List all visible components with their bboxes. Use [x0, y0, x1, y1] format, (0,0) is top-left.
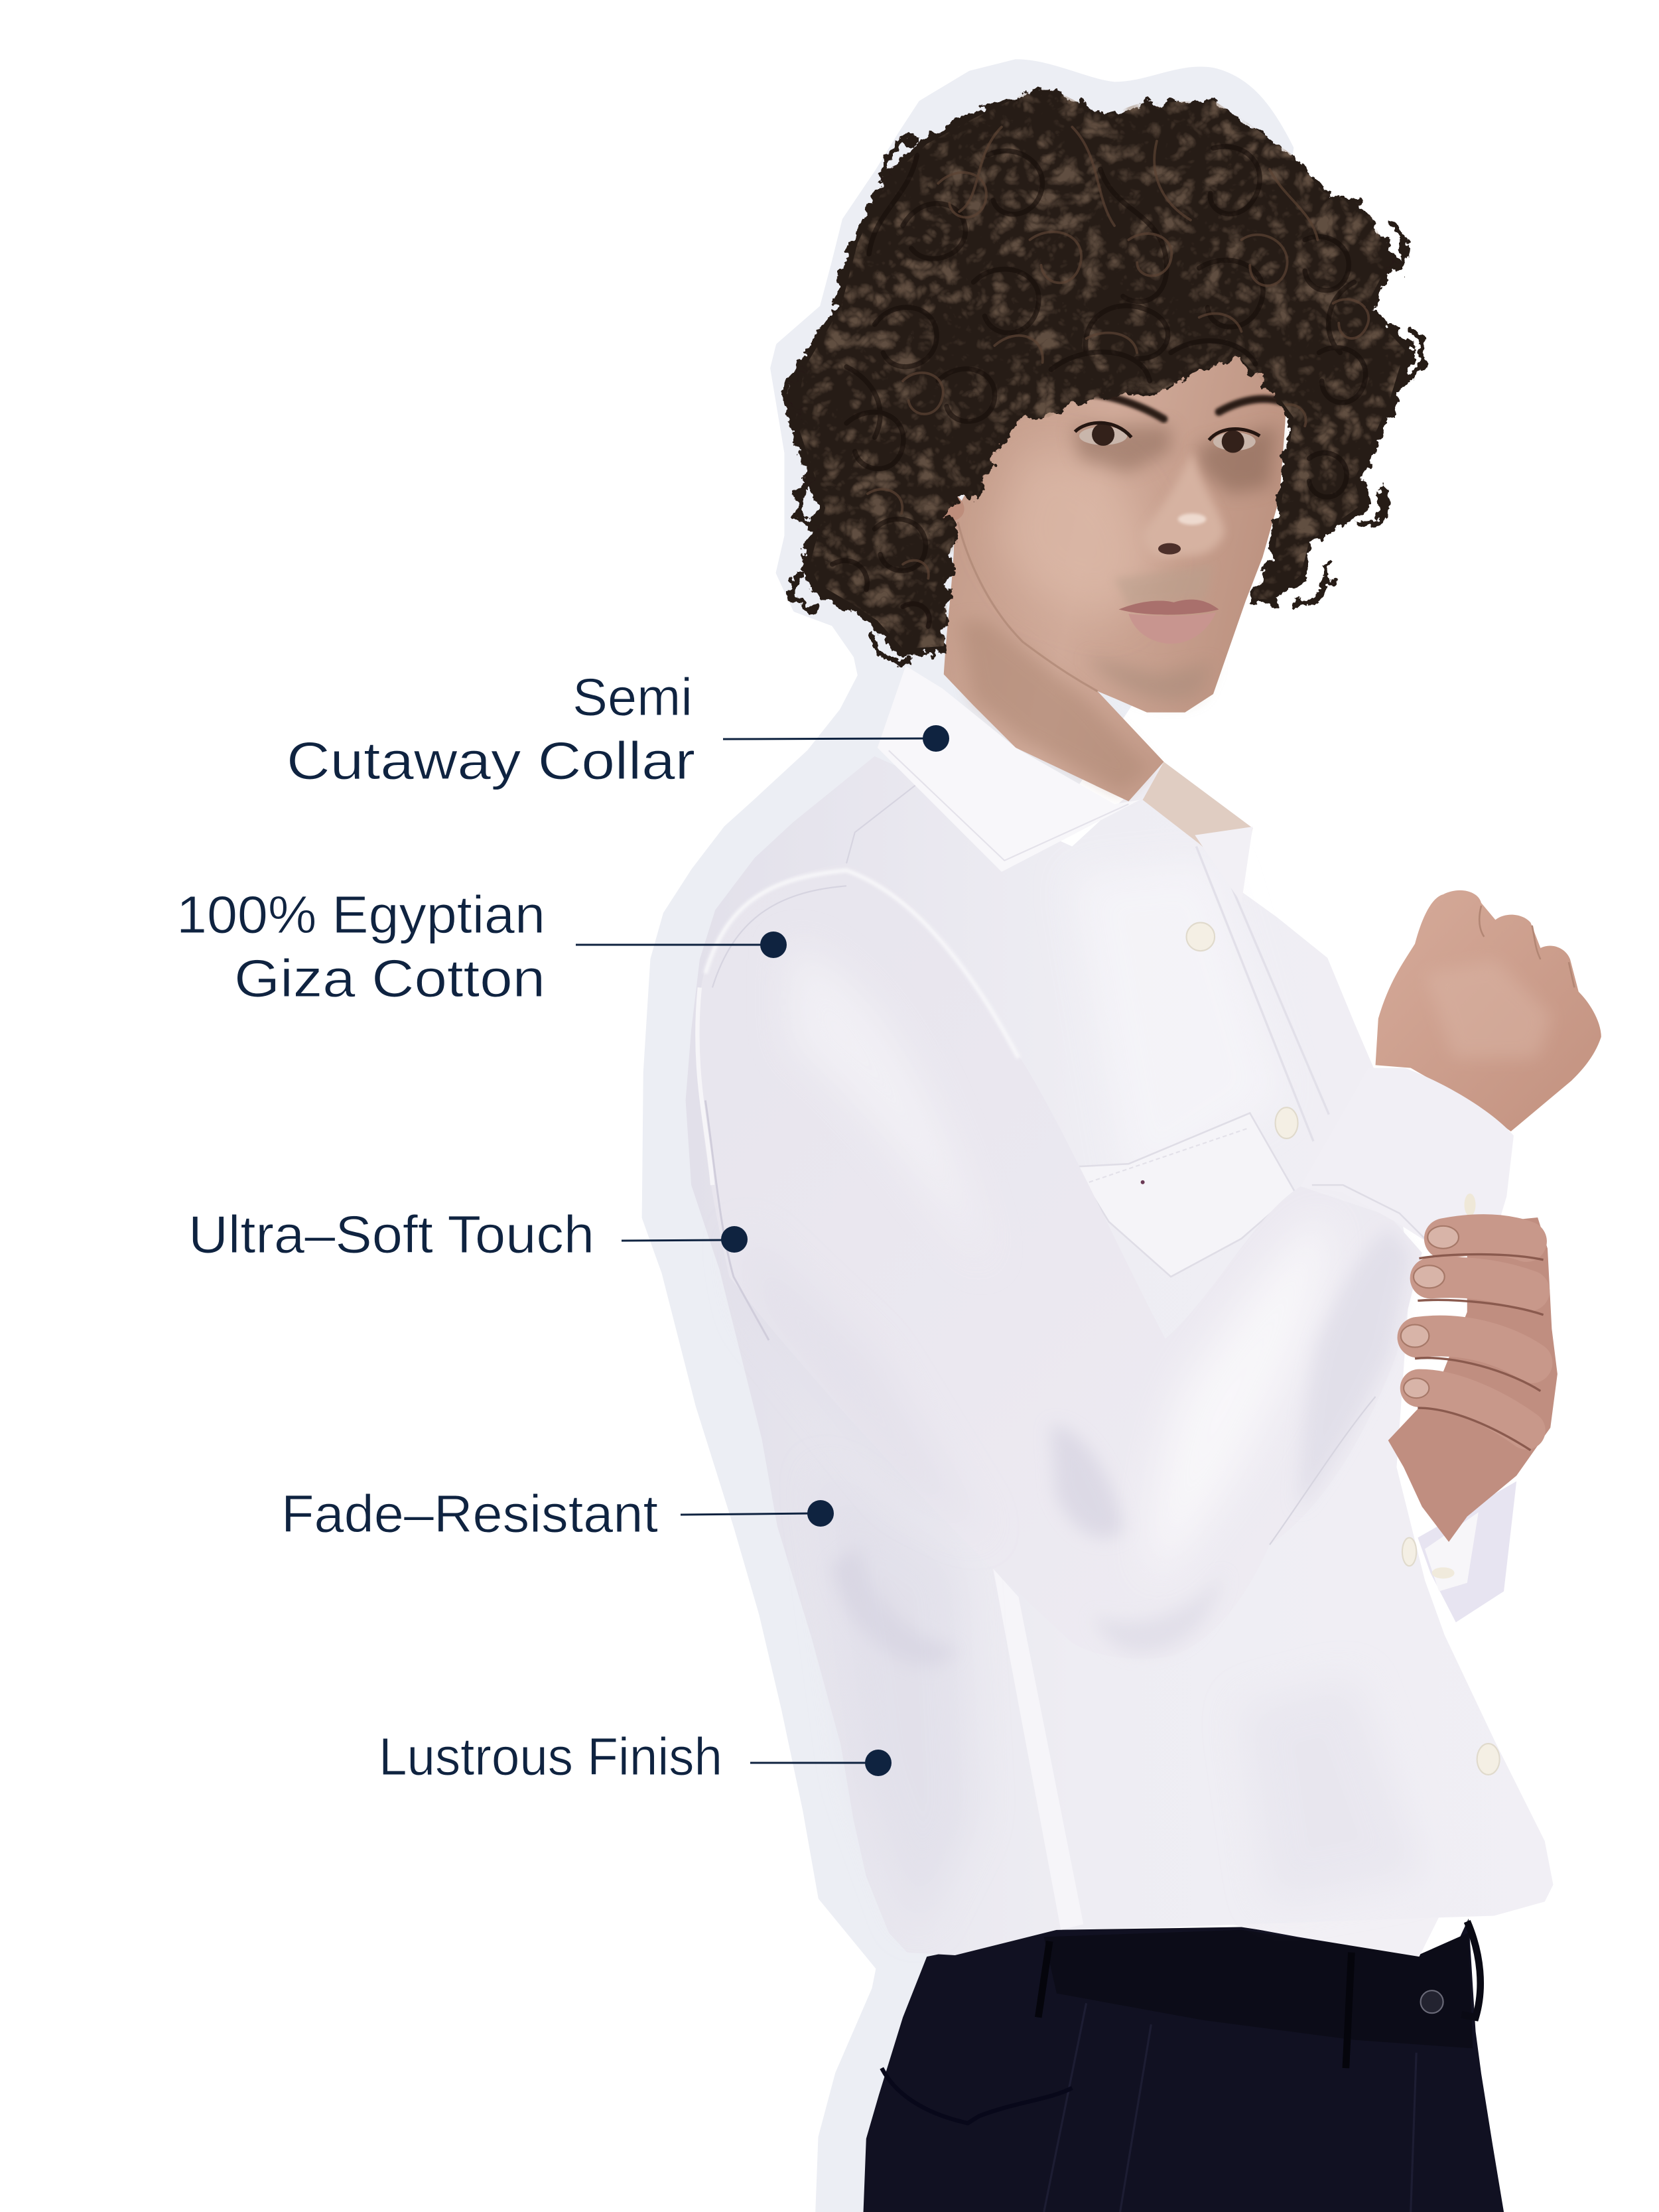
lower hand with fingers	[1388, 1217, 1558, 1542]
label text: Ultra–Soft Touch	[188, 1205, 594, 1264]
fingernails	[1401, 1226, 1459, 1398]
main sleeve	[697, 773, 1422, 1659]
label text: Giza Cotton: Giza Cotton	[234, 949, 545, 1008]
eyebrows	[1061, 393, 1284, 419]
chest pocket	[1075, 1113, 1295, 1277]
label text: Semi: Semi	[572, 667, 693, 726]
leader line	[681, 1513, 813, 1515]
fingers	[1418, 1235, 1532, 1430]
mouth	[1118, 600, 1219, 644]
collar	[878, 666, 1253, 903]
right eye	[1209, 429, 1260, 453]
callout: Ultra-Soft Touch	[188, 1205, 748, 1264]
side strap	[1461, 1921, 1481, 2018]
neck and face	[916, 338, 1287, 801]
marker dot	[721, 1226, 748, 1253]
label text: Cutaway Collar: Cutaway Collar	[287, 731, 695, 790]
shirt body	[686, 756, 1553, 1955]
palm	[1388, 1217, 1558, 1542]
shirt buttons	[1187, 923, 1500, 1775]
lower shirt shading folds	[832, 1545, 959, 1667]
pale lavender halo behind figure	[645, 62, 1291, 2212]
ear	[916, 483, 969, 527]
undershirt fold above waistband	[1199, 1911, 1441, 1957]
hair texture	[796, 88, 1405, 648]
upper fist	[1376, 890, 1601, 1131]
leader line	[622, 1240, 726, 1241]
callout: Lustrous Finish	[379, 1727, 892, 1786]
trousers	[864, 1919, 1504, 2212]
marker dot	[865, 1750, 892, 1776]
callout: Fade-Resistant	[281, 1484, 834, 1543]
hair strands light	[868, 127, 1368, 579]
side seam band	[993, 1568, 1083, 1930]
edge curl loops	[788, 141, 1423, 662]
leader line	[723, 738, 929, 739]
finger gaps	[1415, 1255, 1544, 1450]
rear sleeve and cuff	[1418, 1482, 1516, 1622]
figure: man in white shirt	[645, 62, 1601, 2212]
hair strands dark	[832, 147, 1366, 626]
shoulder seam	[705, 870, 1018, 1058]
leader line	[750, 1762, 870, 1763]
chest placket edge	[1196, 844, 1329, 1141]
label text: 100% Egyptian: 100% Egyptian	[176, 885, 545, 944]
callout: Semi Cutaway Collar	[287, 667, 949, 790]
leader line	[576, 943, 766, 946]
label text: Fade–Resistant	[281, 1484, 658, 1543]
label text: Lustrous Finish	[379, 1727, 722, 1786]
trouser pocket	[882, 2068, 1072, 2123]
marker dot	[923, 725, 949, 752]
waist button	[1421, 1990, 1443, 2013]
upper shirt cuff	[1301, 1068, 1514, 1241]
callout: 100% Egyptian Giza Cotton	[176, 885, 787, 1008]
sleeve shadows and highlights	[1051, 1425, 1124, 1538]
marker dot	[760, 932, 787, 958]
left eye	[1075, 423, 1132, 446]
hair	[776, 78, 1425, 670]
nose	[1143, 451, 1225, 557]
waistband	[1044, 1930, 1473, 2048]
marker dot	[807, 1500, 834, 1527]
